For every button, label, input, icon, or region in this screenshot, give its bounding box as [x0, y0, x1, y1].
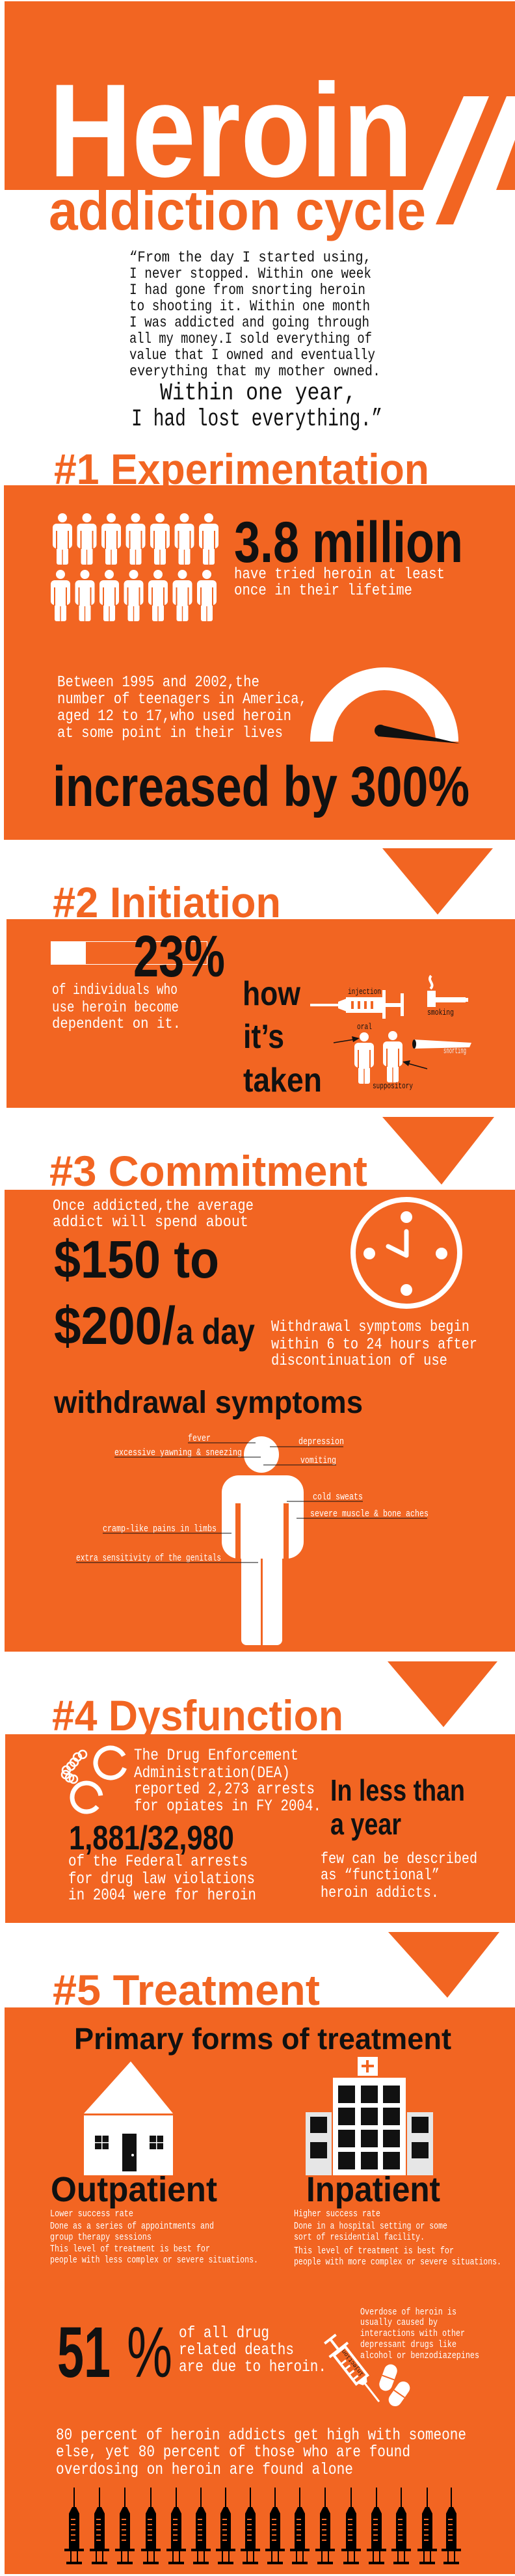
label: outpatient: Outpatient [51, 2170, 217, 2209]
icon: clock [353, 1200, 460, 1306]
labels: symptoms: cramp-like pains in limbs [103, 1523, 217, 1535]
icon: smoking pipe [427, 976, 468, 1017]
text: withdrawal onset: discontinuation of use [271, 1352, 447, 1370]
heading: primary forms: Primary forms of treatment [74, 2022, 451, 2056]
stat: $150 to $200 a day: $150 to [54, 1230, 219, 1289]
quote: I was addicted and going through [129, 314, 369, 331]
stat: 51%: % [127, 2313, 172, 2393]
text: inpatient details: sort of residential facility. [294, 2232, 425, 2243]
quote: “From the day I started using, [129, 249, 371, 266]
text: federal arrests: for drug law violations [68, 1870, 255, 1888]
stat: 1,881/32,980: 1,881/32,980 [69, 1819, 234, 1857]
label: inpatient: Inpatient [306, 2170, 440, 2209]
icon: snorting tube: snorting [443, 1046, 466, 1056]
text: overdose note: depressant drugs like [360, 2339, 456, 2350]
heading: how it's taken [243, 975, 322, 1099]
text: DEA arrests: Administration(DEA) [134, 1764, 290, 1782]
icon: tilted syringe and pills [320, 2331, 412, 2409]
heading #5: #5 Treatment [53, 1966, 320, 2014]
stat: 51% [57, 2313, 172, 2393]
quote: value that I owned and eventually [129, 347, 375, 364]
arrow: triangle 1 [382, 848, 493, 915]
text: tried heroin: once in their lifetime [234, 582, 412, 600]
header banner [5, 1, 515, 224]
heading: how it's taken: how [243, 975, 300, 1013]
text: dependent: dependent on it. [52, 1015, 181, 1032]
text: inpatient details: This level of treatment is best for [294, 2246, 454, 2257]
text: drug deaths: of all drug [179, 2324, 269, 2342]
icon: smoking pipe: smoking [427, 1008, 454, 1017]
text: outpatient details: group therapy sessions [50, 2232, 152, 2243]
labels: symptoms: depression [298, 1436, 344, 1447]
text: overdose note: alcohol or benzodiazepines [360, 2350, 479, 2361]
arrow: triangle 4 [388, 1932, 499, 1998]
text: 80 percent [56, 2426, 466, 2479]
progress bar [51, 941, 207, 965]
text: outpatient details: This level of treatment is best for [50, 2244, 210, 2255]
text: outpatient details: Done as a series of appointments and [50, 2221, 214, 2232]
title: Heroin: Heroin [49, 57, 413, 205]
icon: oral & suppository figures [334, 1022, 427, 1091]
icon: oral & suppository figures: suppository [373, 1081, 413, 1091]
text: dependent [52, 982, 181, 1032]
stat: 51%: 51 [57, 2313, 111, 2393]
text: inpatient details [294, 2208, 501, 2268]
stat: in less than a year: In less than [330, 1773, 465, 1807]
icon: injection syringe: injection [348, 987, 381, 997]
text: inpatient details: Higher success rate [294, 2208, 380, 2220]
text: federal arrests: in 2004 were for heroin [68, 1886, 256, 1905]
stat: $150 to $200 a day [54, 1230, 255, 1356]
text: DEA arrests [134, 1746, 321, 1816]
text: overdose note: usually caused by [360, 2317, 438, 2328]
quote: I had lost everything.” [131, 406, 382, 433]
stat: 23%: 23% [133, 924, 225, 989]
icon: tilted syringe and pills: injection [341, 2348, 365, 2377]
icon: syringe row [64, 2488, 461, 2564]
text: functional addicts: few can be described [321, 1851, 477, 1868]
icon: house [84, 2061, 173, 2175]
panel: experimentation [4, 485, 515, 840]
text: once addicted: addict will spend about [53, 1214, 248, 1231]
icon: handcuffs [62, 1744, 129, 1818]
text: functional addicts: heroin addicts. [321, 1885, 439, 1902]
labels: symptoms: fever [188, 1433, 211, 1444]
text: withdrawal onset: Withdrawal symptoms begin [271, 1319, 469, 1336]
quote: everything that my mother owned. [129, 363, 380, 380]
stat: in less than a year: a year [330, 1807, 401, 1841]
labels: symptoms: cold sweats [313, 1492, 363, 1503]
text: withdrawal onset [271, 1319, 477, 1370]
text: withdrawal onset: within 6 to 24 hours after [271, 1336, 477, 1354]
stat: $150 to $200 a day: $200/ [54, 1296, 176, 1356]
icon: gauge [310, 667, 460, 744]
quote: Within one year, [160, 380, 356, 407]
text: drug deaths: related deaths [179, 2341, 294, 2359]
text: dependent: use heroin become [52, 999, 179, 1016]
quote: all my money.I sold everything of [129, 330, 372, 347]
heading: how it's taken: taken [243, 1062, 322, 1099]
text: dependent: of individuals who [52, 982, 178, 999]
text: functional addicts: as “functional” [321, 1867, 440, 1885]
text: teenagers: Between 1995 and 2002,the [57, 674, 259, 691]
quote [129, 249, 382, 433]
panel: commitment [5, 1190, 515, 1652]
text: federal arrests [68, 1852, 256, 1905]
heading: withdrawal symptoms: withdrawal symptoms [53, 1386, 363, 1420]
text: overdose note [360, 2307, 479, 2361]
text: overdose note: Overdose of heroin is [360, 2307, 456, 2318]
stat: in less than a year [330, 1773, 465, 1841]
icon: injection syringe [310, 987, 404, 1019]
panel: dysfunction [5, 1734, 515, 1923]
text: teenagers: aged 12 to 17,who used heroin [57, 708, 291, 725]
arrow: triangle 2 [382, 1117, 494, 1185]
heading #2: #2 Initiation [53, 878, 281, 926]
text: once addicted [53, 1198, 254, 1231]
quote: I had gone from snorting heroin [129, 282, 365, 299]
text: teenagers: number of teenagers in America, [57, 691, 307, 708]
text: drug deaths [179, 2324, 326, 2376]
text: 80 percent: else, yet 80 percent of those who are found [56, 2443, 410, 2462]
panel: initiation [7, 919, 515, 1108]
text: functional addicts [321, 1851, 477, 1902]
icon: body figure [222, 1436, 304, 1645]
heading #1: #1 Experimentation [54, 445, 429, 493]
text: teenagers: at some point in their lives [57, 725, 283, 742]
text: overdose note: interactions with other [360, 2328, 465, 2339]
labels: symptoms: excessive yawning & sneezing [114, 1447, 242, 1458]
text: DEA arrests: for opiates in FY 2004. [134, 1797, 321, 1816]
subtitle: addiction cycle: addiction cycle [49, 180, 426, 242]
icon: snorting tube [412, 1040, 471, 1056]
text: outpatient details: people with less complex or severe situations. [50, 2255, 258, 2266]
panel: treatment [5, 2007, 515, 2574]
quote: to shooting it. Within one month [129, 298, 370, 315]
text: once addicted: Once addicted,the average [53, 1198, 254, 1215]
icon: hospital [306, 2057, 433, 2175]
text: outpatient details: Lower success rate [50, 2208, 133, 2220]
text: federal arrests: of the Federal arrests [68, 1852, 248, 1871]
text: drug deaths: are due to heroin. [179, 2357, 326, 2376]
text: outpatient details [50, 2208, 258, 2266]
labels: symptoms [76, 1433, 429, 1564]
text: tried heroin: have tried heroin at least [234, 566, 445, 584]
quote: I never stopped. Within one week [129, 265, 371, 282]
text: teenagers [57, 674, 307, 742]
text: DEA arrests: The Drug Enforcement [134, 1746, 298, 1765]
text: 80 percent: overdosing on heroin are found alone [56, 2460, 353, 2479]
arrow: triangle 3 [388, 1661, 497, 1727]
labels: symptoms: vomiting [300, 1455, 336, 1466]
text: DEA arrests: reported 2,273 arrests [134, 1780, 315, 1799]
labels: symptoms: severe muscle & bone aches [310, 1509, 429, 1520]
icon: oral & suppository figures: oral [357, 1022, 372, 1032]
heading #3: #3 Commitment [49, 1147, 367, 1195]
labels: symptoms: extra sensitivity of the genitals [76, 1553, 221, 1564]
text: tried heroin [234, 566, 445, 600]
text: inpatient details: Done in a hospital setting or some [294, 2221, 447, 2232]
heading: how it's taken: it’s [243, 1018, 284, 1056]
stat: 3.8 million: 3.8 million [234, 509, 463, 574]
stat: $150 to $200 a day: a day [176, 1311, 255, 1352]
heading #4: #4 Dysfunction [52, 1691, 343, 1739]
icon: people grid [51, 513, 218, 621]
